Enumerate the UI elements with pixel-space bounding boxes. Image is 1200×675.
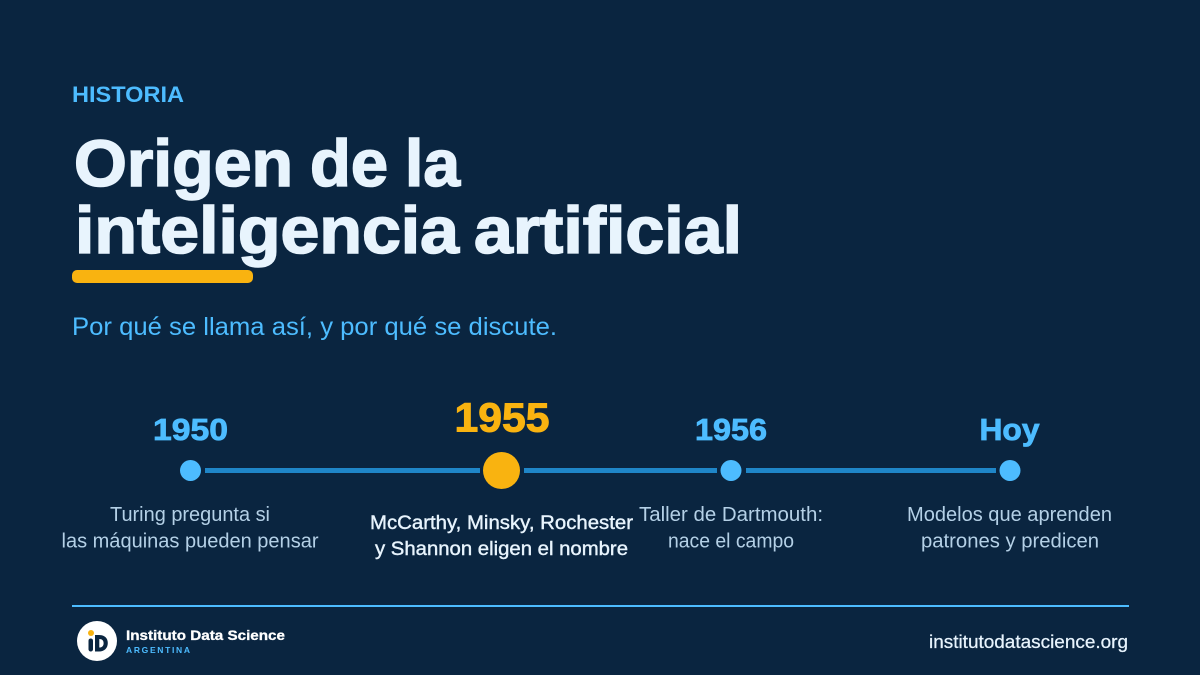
milestone: 1956: Taller de Dartmouth: [639, 504, 823, 526]
milestone: 1950: Turing pregunta si [110, 504, 270, 526]
title underline accent [72, 270, 253, 283]
eyebrow label: HISTORIA: HISTORIA [72, 82, 184, 107]
logo wordmark: Instituto Data Science [126, 627, 285, 643]
footer divider [72, 605, 1129, 607]
milestone: Hoy: patrones y predicen [921, 530, 1099, 552]
milestone: Hoy [907, 412, 1112, 552]
title: inteligencia [75, 193, 460, 267]
milestone: 1950: 1950 [153, 412, 228, 447]
timeline [62, 394, 1112, 560]
milestone: 1955 highlighted: y Shannon eligen el nombre [375, 538, 628, 560]
icon: iD logo badge [77, 621, 117, 661]
milestone: 1950 [62, 412, 319, 552]
footer url: institutodatascience.org [929, 632, 1128, 652]
milestone: 1955 highlighted: McCarthy, Minsky, Rochester [370, 512, 634, 534]
title [74, 126, 742, 267]
milestone: 1956: nace el campo [668, 530, 794, 552]
milestone: 1955 highlighted: 1955 [454, 394, 550, 440]
logo sublabel: ARGENTINA [126, 645, 190, 655]
milestone: 1955 highlighted [370, 394, 634, 560]
subtitle: Por qué se llama así, y por qué se discute. [72, 313, 557, 341]
title: de [310, 126, 388, 200]
milestone: 1956 [639, 412, 823, 552]
milestone: 1956: 1956 [695, 412, 767, 447]
title: la [405, 126, 461, 200]
timeline connector lines [205, 468, 996, 473]
title: artificial [474, 193, 742, 267]
milestone: Hoy: Modelos que aprenden [907, 504, 1112, 526]
milestone: 1950: las máquinas pueden pensar [62, 530, 319, 552]
title: Origen [74, 126, 293, 200]
footer logo [77, 621, 285, 661]
milestone: Hoy: Hoy [980, 412, 1040, 447]
